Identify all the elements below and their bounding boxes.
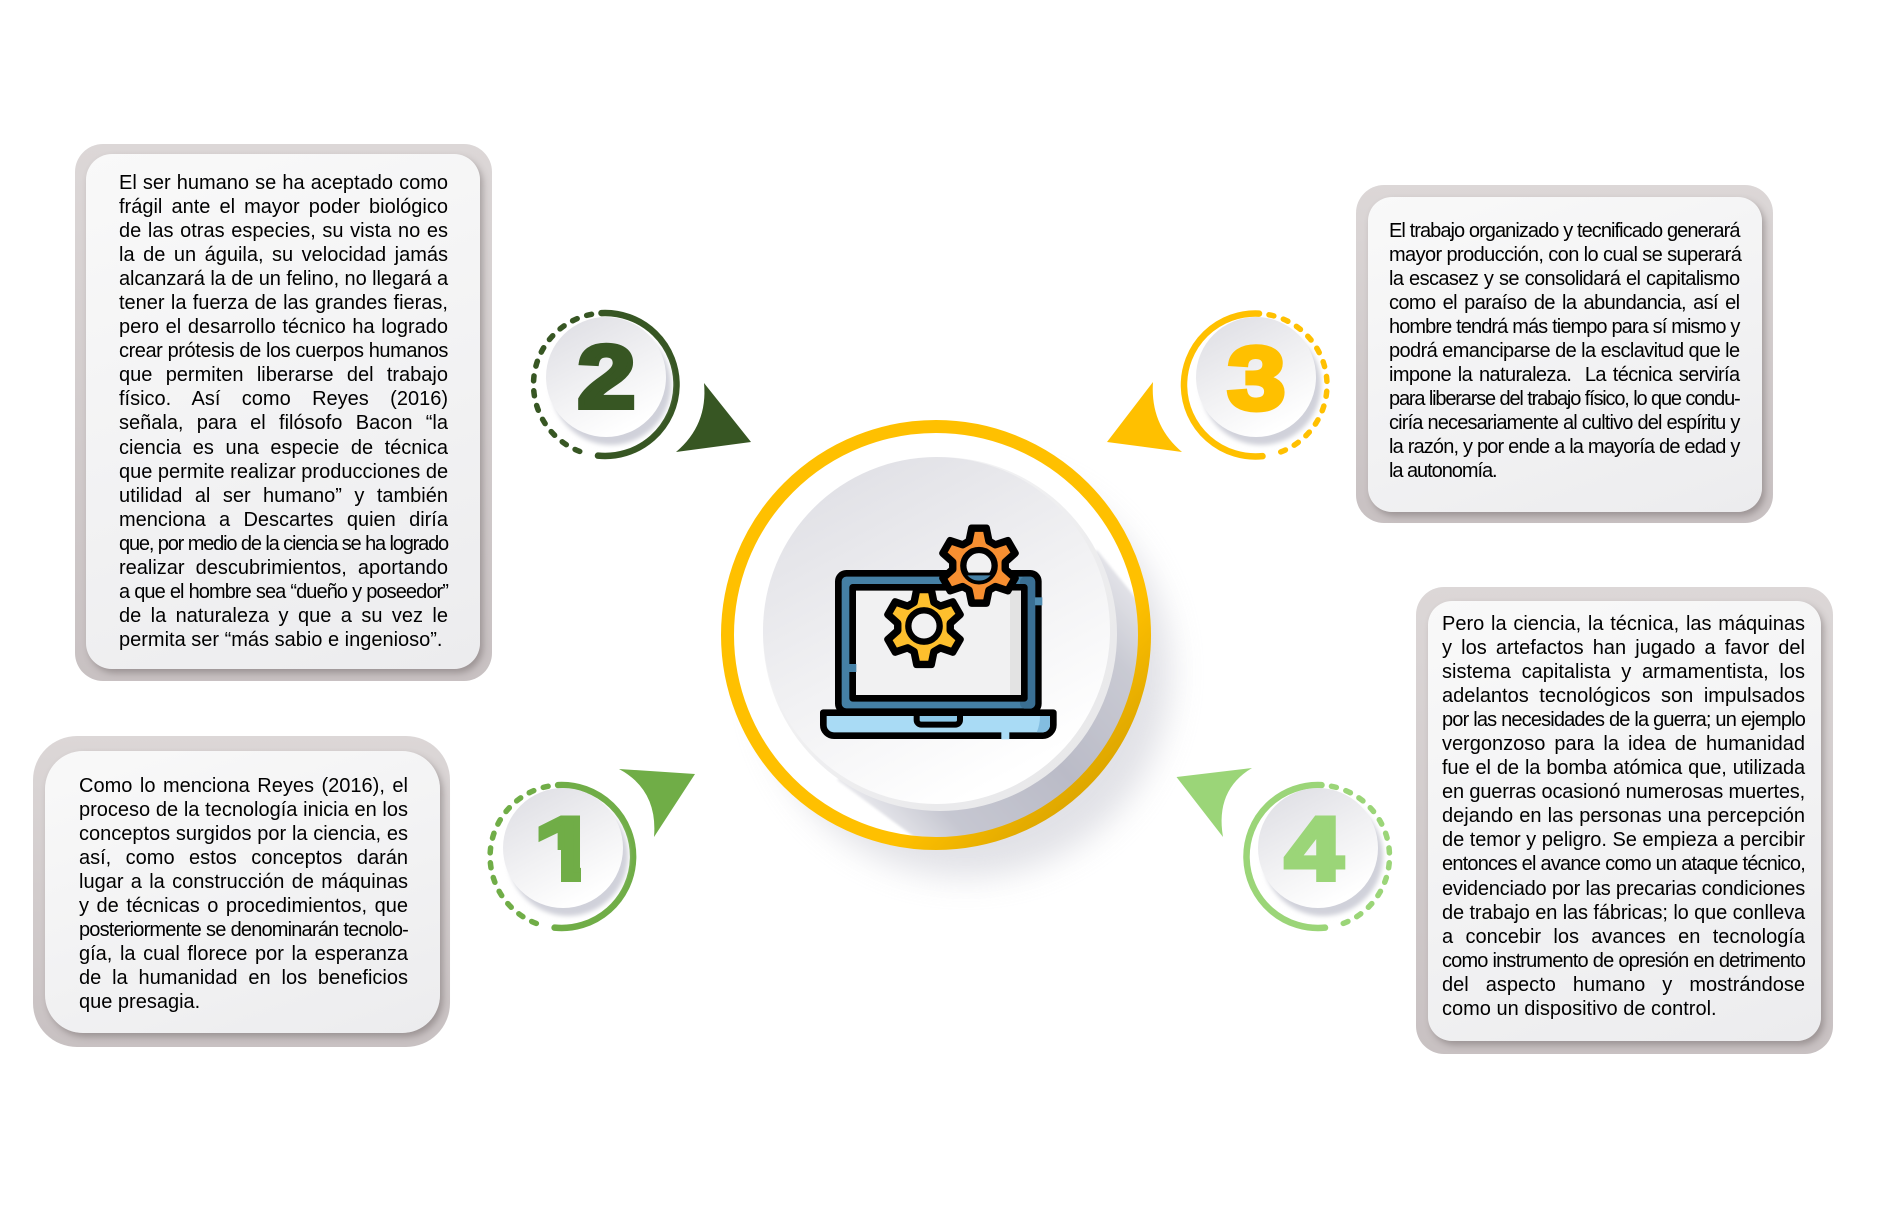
arrow 2 [676, 383, 751, 452]
number 2: 2 [578, 327, 635, 427]
badge 3 [1184, 314, 1327, 457]
text block 2: tener la fuerza de las grandes fieras, [119, 292, 448, 314]
text block 4: sistema capitalista y armamentista, los [1442, 661, 1805, 683]
text block 4: y los artefactos han jugado a favor del [1442, 637, 1805, 659]
text block 2 [119, 172, 448, 651]
text block 2: realizar descubrimientos, aportando [119, 557, 448, 579]
text block 4: por las necesidades de la guerra; un ejemplo [1442, 709, 1805, 731]
text block 4: del aspecto humano y mostrándose [1442, 974, 1805, 996]
text block 4 [1442, 613, 1806, 1020]
text block 2: menciona a Descartes quien diría [119, 509, 448, 531]
text block 2: que permiten liberarse del trabajo [119, 364, 448, 386]
text block 4: como un dispositivo de control. [1442, 998, 1717, 1020]
text block 4: evidenciado por las precarias condiciones [1442, 878, 1805, 900]
badge 4 [1246, 785, 1390, 928]
text block 2: que, por medio de la ciencia se ha logrado [119, 533, 448, 555]
arrow 3 [1107, 382, 1182, 452]
text block 3: El trabajo organizado y tecnificado generará [1389, 220, 1740, 242]
badge 1 [490, 785, 633, 928]
text block 1: gía, la cual florece por la esperanza [79, 943, 408, 965]
text block 4: en guerras ocasionó numerosas muertes, [1442, 781, 1805, 803]
text block 1: de la humanidad en los beneficios [79, 967, 408, 989]
text block 4: de temor y peligro. Se empieza a percibir [1442, 829, 1805, 851]
text block 2: que permite realizar producciones de [119, 461, 448, 483]
arrow 4 [1176, 768, 1252, 837]
badge 2 [533, 313, 677, 456]
text block 4: Pero la ciencia, la técnica, las máquinas [1442, 613, 1805, 635]
panel: text 3 [1356, 185, 1773, 523]
text block 2: a que el hombre sea “dueño y poseedor” [119, 581, 448, 603]
text block 3: hombre tendrá más tiempo para sí mismo y [1389, 316, 1740, 338]
diagram: centre icon, numbered badges and arrows [487, 310, 1392, 932]
arrow 1 [619, 769, 695, 837]
text block 1: Como lo menciona Reyes (2016), el [79, 775, 408, 797]
text block 2: crear prótesis de los cuerpos humanos [119, 340, 448, 362]
text block 2: la de un águila, su velocidad jamás [119, 244, 448, 266]
text block 3: ciría necesariamente al cultivo del espíritu y [1389, 412, 1740, 434]
text block 4: a concebir los avances en tecnología [1442, 926, 1805, 948]
text block 2: utilidad al ser humano” y también [119, 485, 448, 507]
text block 4: entonces el avance como un ataque técnico, [1442, 853, 1805, 875]
text block 3: la escasez y se consolidará el capitalismo [1389, 268, 1740, 290]
text block 3: la razón, y por ende a la mayoría de edad y [1389, 436, 1740, 458]
text block 4: dejando en las personas una percepción [1442, 805, 1805, 827]
text block 3: para liberarse del trabajo físico, lo que condu- [1389, 388, 1740, 410]
text block 4: vergonzoso para la idea de humanidad [1442, 733, 1805, 755]
text block 2: físico. Así como Reyes (2016) [119, 388, 448, 410]
text block 2: de las otras especies, su vista no es [119, 220, 448, 242]
text block 2: señala, para el filósofo Bacon “la [119, 412, 448, 434]
number 3: 3 [1228, 328, 1285, 428]
central circle [721, 420, 1180, 886]
number 1: 1 [534, 799, 598, 898]
text block 2: alcanzará la de un felino, no llegará a [119, 268, 448, 290]
text block 1: conceptos surgidos por la ciencia, es [79, 823, 408, 845]
panel: text 1 [33, 736, 450, 1047]
text block 2: ciencia es una especie de técnica [119, 437, 448, 459]
text block 3: impone la naturaleza. La técnica serviría [1389, 364, 1740, 386]
panel: text 4 [1416, 587, 1833, 1054]
text block 3: podrá emanciparse de la esclavitud que le [1389, 340, 1740, 362]
text block 2: El ser humano se ha aceptado como [119, 172, 448, 194]
text block 1: que presagia. [79, 991, 200, 1013]
text block 1: así, como estos conceptos darán [79, 847, 408, 869]
text block 2: pero el desarrollo técnico ha logrado [119, 316, 448, 338]
text block 3: como el paraíso de la abundancia, así el [1389, 292, 1740, 314]
icon: laptop with gears [823, 528, 1053, 739]
text block 4: de trabajo en las fábricas; lo que conlleva [1442, 902, 1805, 924]
text block 3: la autonomía. [1389, 460, 1497, 482]
text block 4: adelantos tecnológicos son impulsados [1442, 685, 1805, 707]
text block 1 [79, 775, 408, 1013]
text block 2: frágil ante el mayor poder biológico [119, 196, 448, 218]
text block 3: mayor producción, con lo cual se superará [1389, 244, 1741, 266]
number 4: 4 [1285, 799, 1343, 899]
text block 1: posteriormente se denominarán tecnolo- [79, 919, 408, 941]
text block 1: lugar a la construcción de máquinas [79, 871, 408, 893]
text block 1: proceso de la tecnología inicia en los [79, 799, 408, 821]
text block 4: como instrumento de opresión en detrimento [1442, 950, 1805, 972]
text block 4: fue el de la bomba atómica que, utilizada [1442, 757, 1805, 779]
text block 2: permita ser “más sabio e ingenioso”. [119, 629, 442, 651]
text block 3 [1389, 220, 1742, 482]
panel: text 2 [75, 144, 492, 681]
text block 1: y de técnicas o procedimientos, que [79, 895, 408, 917]
text block 2: de la naturaleza y que a su vez le [119, 605, 448, 627]
